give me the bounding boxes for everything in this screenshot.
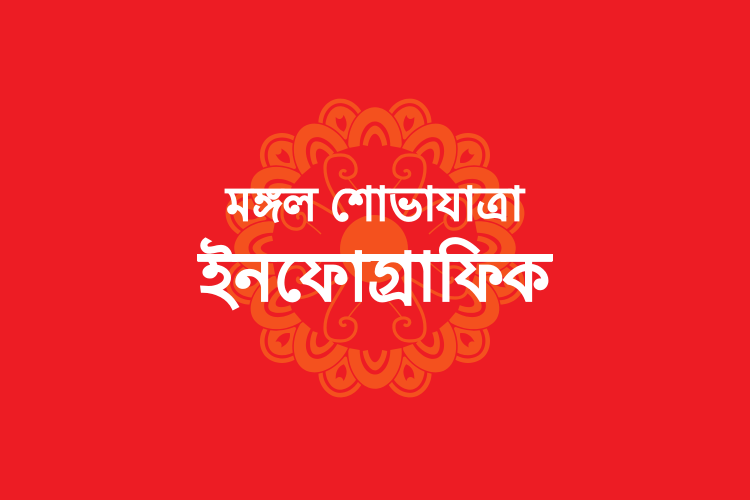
mandala: centre disc [340, 215, 408, 283]
mandala: scrolls [282, 155, 468, 341]
mandala: inner petals [234, 107, 516, 389]
mandala: outer petals [220, 93, 530, 403]
title line 2: ইনফোগ্রাফিক [200, 240, 550, 314]
title line 1: মঙ্গল শোভাযাত্রা [227, 178, 523, 230]
